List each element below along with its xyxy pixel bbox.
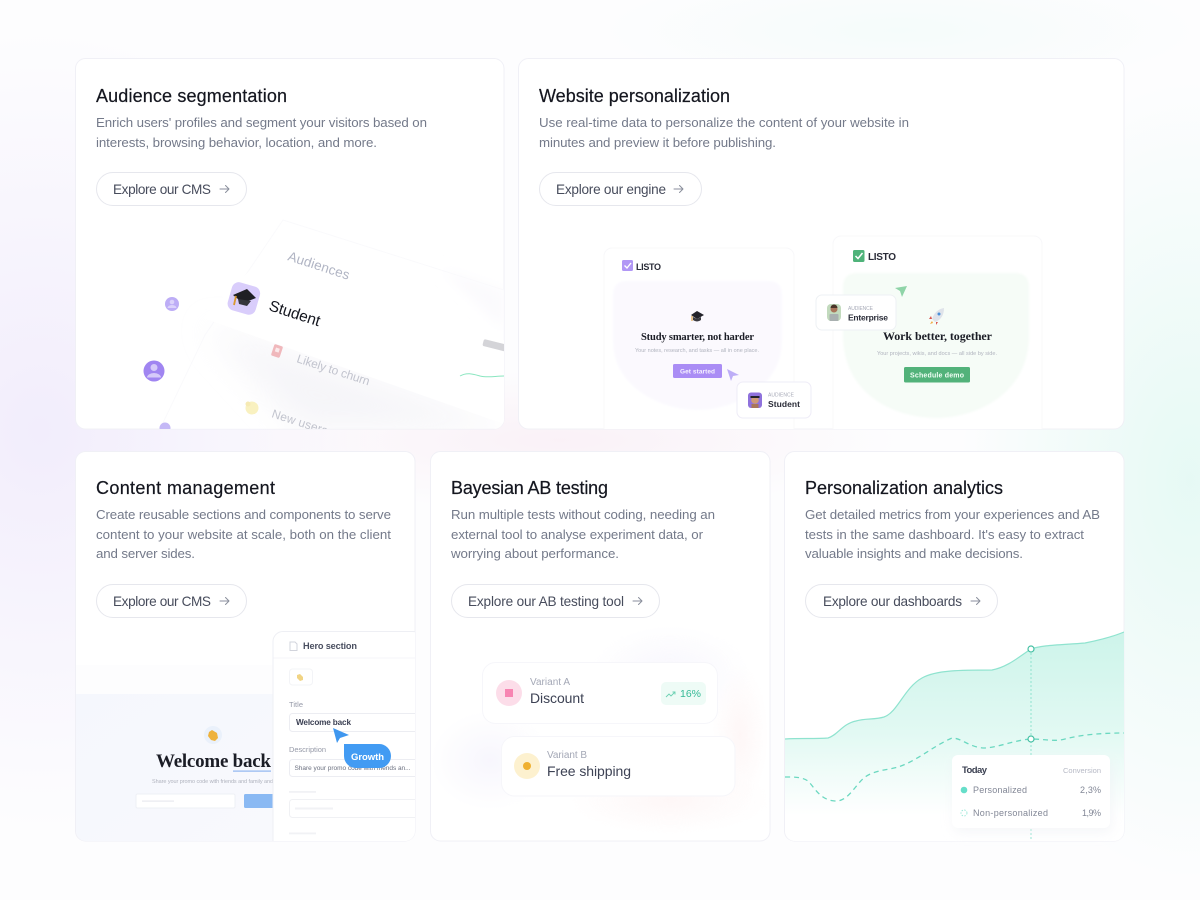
chip: audience enterprise: AUDIENCE <box>848 306 874 312</box>
text: audience description: interests, browsing behavior, location, and more. <box>96 135 377 150</box>
button: explore our dashboards <box>806 584 998 618</box>
illustration: rotated audience cards <box>144 252 504 429</box>
website preview: enterprise variant: Your projects, wikis, and docs — all side by side. <box>877 351 997 357</box>
chip: audience student <box>737 382 811 418</box>
badge: 16 percent uplift: 16% <box>680 688 701 700</box>
button: explore our CMS <box>96 172 246 206</box>
tooltip: today conversion: Conversion <box>1063 766 1101 775</box>
text: analytics description <box>805 507 1100 561</box>
text: AB testing description: worrying about performance. <box>450 546 619 561</box>
chart: conversion area and lines <box>785 632 1124 841</box>
soft shadow below student row <box>272 367 392 415</box>
field: description: Description <box>289 745 326 754</box>
text: content description: content to your website at scale, both on the client <box>96 527 391 542</box>
website preview: welcome back: Share your promo code with friends and family and <box>152 779 273 785</box>
icon: yellow dot <box>514 753 540 779</box>
text: website description: minutes and preview it before publishing. <box>539 135 776 150</box>
button: explore our AB testing tool <box>452 584 660 618</box>
card: variant A: Variant A <box>530 677 570 688</box>
data points <box>1028 646 1034 742</box>
logo: listo green: LISTO <box>868 252 896 263</box>
button: explore our AB testing tool: Explore our AB testing tool <box>468 594 624 609</box>
logo: listo purple: LISTO <box>636 262 661 272</box>
tooltip: today conversion: 1,9% <box>1082 808 1101 818</box>
card: variant A: Discount <box>530 690 584 706</box>
row: likely to churn: Likely to churn <box>295 352 372 388</box>
card: variant B: Variant B <box>547 750 587 761</box>
button: explore our engine: Explore our engine <box>556 182 666 197</box>
panel: bayesian AB testing <box>430 452 770 841</box>
icon: rocket <box>929 308 944 325</box>
placeholder fields <box>289 791 430 834</box>
card: variant B <box>502 736 735 796</box>
tooltip: today conversion: Personalized <box>973 785 1027 795</box>
website preview: student variant: Study smarter, not harder <box>641 332 754 343</box>
field: description <box>289 746 415 777</box>
website preview: enterprise variant <box>834 250 1042 429</box>
website preview: enterprise variant: Work better, together <box>883 329 993 343</box>
panel: student row <box>228 282 504 378</box>
text: analytics description: valuable insights and make decisions. <box>805 546 1023 561</box>
chip: audience student: AUDIENCE <box>768 392 795 398</box>
icon: graduation cap <box>691 311 704 322</box>
back panel: audiences list <box>170 252 504 429</box>
heading: personalization analytics: Personalization analytics <box>805 478 1003 498</box>
button: explore our CMS: Explore our CMS <box>113 594 211 609</box>
logo: listo purple <box>622 260 661 272</box>
soft background glows <box>430 625 770 834</box>
tooltip: today conversion: Non-personalized <box>973 808 1048 818</box>
row: new users <box>246 402 327 429</box>
cursor: green <box>895 286 907 297</box>
website preview: welcome back <box>76 694 272 841</box>
heading: bayesian AB testing: Bayesian AB testing <box>451 478 608 498</box>
cursor and growth tag: Growth <box>351 752 384 763</box>
website preview: student variant <box>604 260 794 429</box>
field: title <box>289 702 415 732</box>
button: explore our CMS <box>96 584 246 618</box>
heading: audience segmentation: Audience segmentation <box>96 86 287 106</box>
badge: 16 percent uplift <box>661 682 706 705</box>
icon: waving hand <box>204 726 222 744</box>
field: title: Welcome back <box>296 718 351 727</box>
text: website description: Use real-time data to personalize the content of your website in <box>539 115 909 130</box>
logo: listo green <box>853 250 896 263</box>
button: explore our CMS: Explore our CMS <box>113 182 211 197</box>
chip: audience student: Student <box>768 399 800 409</box>
icon: pink square <box>496 680 522 706</box>
text: AB testing description: Run multiple tests without coding, needing an <box>451 507 715 522</box>
button: get started: Get started <box>680 368 715 376</box>
panel: student row: Student <box>267 298 323 330</box>
field: description: Share your promo code with friends an... <box>294 765 411 772</box>
chip: audience enterprise <box>816 295 896 330</box>
text: analytics description: tests in the same dashboard. It's easy to extract <box>805 527 1084 542</box>
heading: website personalization: Website personalization <box>539 86 730 106</box>
text: audience description <box>96 115 427 150</box>
marker line <box>1030 653 1032 839</box>
text: website description <box>539 115 909 150</box>
line: non-personalized dashed <box>785 733 1124 801</box>
icon: document <box>290 642 297 650</box>
cursor: purple <box>727 369 739 381</box>
text: AB testing description: external tool to analyse experiment data, or <box>451 527 704 542</box>
button: explore our dashboards: Explore our dashboards <box>823 594 962 609</box>
text: content description <box>96 507 391 561</box>
website preview: welcome back: Welcome back <box>156 751 271 772</box>
tooltip: today conversion: 2,3% <box>1080 785 1101 795</box>
field: title: Title <box>289 700 303 709</box>
text: audience description: Enrich users' profiles and segment your visitors based on <box>96 115 427 130</box>
panel: content management <box>76 452 430 856</box>
website preview: student variant: Your notes, research, and tasks — all in one place. <box>635 348 759 354</box>
panel: hero section editor <box>272 631 415 841</box>
button: schedule demo: Schedule demo <box>910 372 964 380</box>
panel: personalization analytics <box>784 452 1124 841</box>
panel: website personalization <box>518 58 1124 456</box>
text: content description: and server sides. <box>96 546 195 561</box>
chip: audience enterprise: Enterprise <box>848 312 888 322</box>
panel: audience segmentation <box>76 58 509 438</box>
row: new users: New users <box>270 407 330 438</box>
button: explore our engine <box>540 172 702 206</box>
text: AB testing description <box>450 507 715 561</box>
heading: content management: Content management <box>96 478 275 498</box>
tooltip: today conversion: Today <box>962 765 988 776</box>
cursor and growth tag <box>333 728 391 768</box>
row: likely to churn <box>271 344 372 388</box>
icon box: hand <box>290 669 312 685</box>
card: variant B: Free shipping <box>547 763 631 779</box>
text: content description: Create reusable sections and components to serve <box>96 507 391 522</box>
button: get started <box>673 364 722 378</box>
icon: graduation cap <box>228 282 260 315</box>
panel: hero section editor: Hero section <box>303 641 357 651</box>
card: variant A <box>482 662 718 724</box>
avatars <box>144 297 179 434</box>
tooltip: today conversion <box>952 755 1112 832</box>
button: schedule demo <box>904 367 970 382</box>
back panel: audiences list: Audiences <box>286 249 352 283</box>
text: analytics description: Get detailed metrics from your experiences and AB <box>805 507 1100 522</box>
